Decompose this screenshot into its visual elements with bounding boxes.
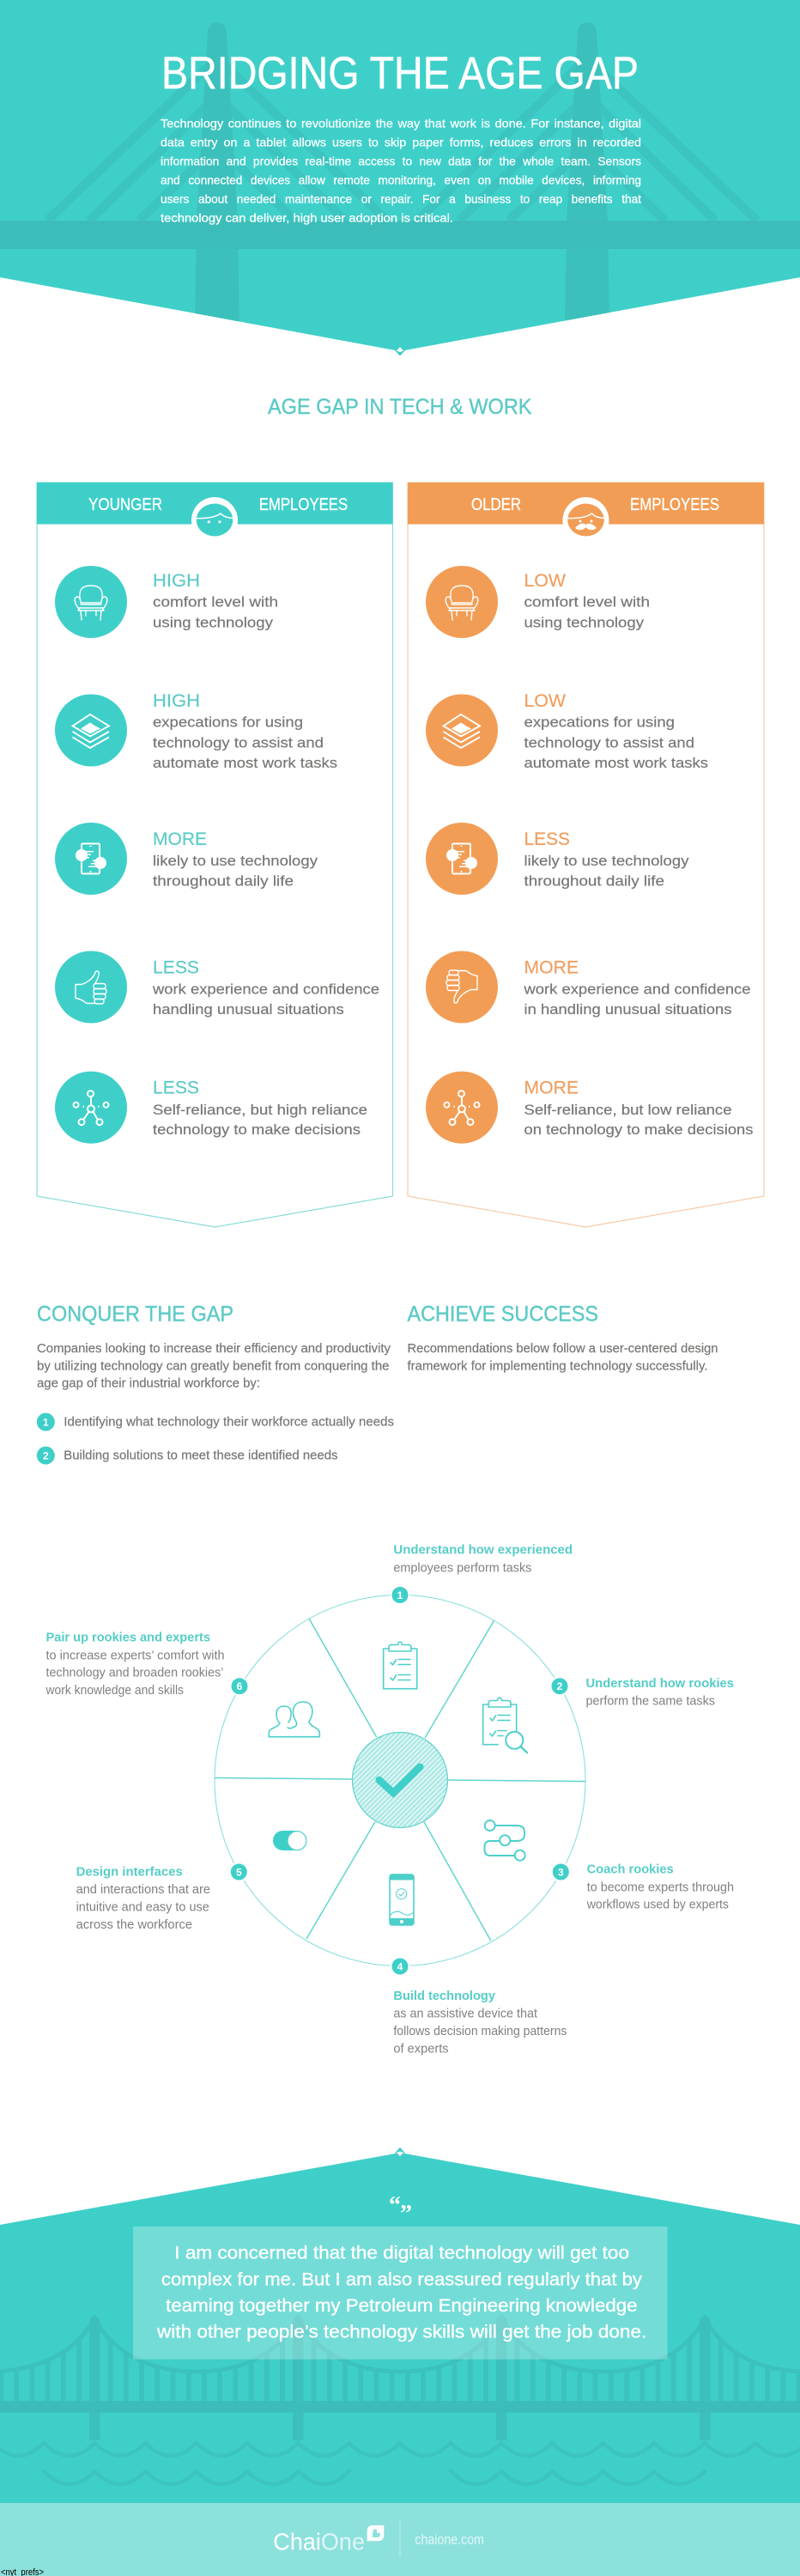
row: work experience: handling unusual situations <box>153 1001 344 1018</box>
row: daily use: likely to use technology <box>153 853 318 869</box>
step 3 text <box>586 1862 734 1912</box>
step 5 text <box>76 1865 210 1932</box>
quote text: I am concerned that the digital technology will get too <box>174 2244 629 2263</box>
row: comfort level: using technology <box>524 614 645 630</box>
quote box <box>133 2227 668 2360</box>
node 6 <box>230 1677 249 1695</box>
quote marks: ” <box>400 2201 412 2227</box>
icon: clipboard with magnifier <box>483 1698 527 1753</box>
node 3 <box>552 1863 570 1880</box>
row: self-reliance: Self-reliance, but low reliance <box>524 1102 731 1118</box>
row: expectations: HIGH <box>153 691 200 711</box>
step 6 text: Pair up rookies and experts <box>46 1631 210 1644</box>
step 4 text: as an assistive device that <box>393 2008 537 2021</box>
row: daily use <box>426 823 689 895</box>
footer <box>0 2503 800 2576</box>
icon: workflow path <box>484 1820 525 1861</box>
heading: age gap in tech and work: AGE GAP IN TECH & WORK <box>268 395 532 419</box>
list item 1: Identifying what technology their workforce actually needs <box>64 1415 394 1429</box>
hero banner <box>0 0 800 355</box>
header label employees: EMPLOYEES <box>259 495 348 514</box>
closing quote panel <box>0 2148 800 2503</box>
header label younger: YOUNGER <box>88 495 162 514</box>
step 6 text: to increase experts’ comfort with <box>46 1649 225 1662</box>
step 4 text: follows decision making patterns <box>393 2025 567 2038</box>
row: comfort level: HIGH <box>153 571 200 591</box>
step 6 text: work knowledge and skills <box>45 1684 184 1698</box>
node 5 <box>230 1863 248 1880</box>
node 1 <box>391 1586 409 1604</box>
step 5 text: Design interfaces <box>76 1865 183 1879</box>
row: daily use <box>55 823 318 895</box>
list item 2 <box>37 1446 338 1465</box>
row: work experience: work experience and confidence <box>152 981 379 997</box>
node 2 <box>551 1677 568 1695</box>
node 3: 3 <box>558 1867 564 1879</box>
row: expectations <box>55 691 337 771</box>
quote text: complex for me. But I am also reassured regularly that by <box>161 2269 643 2289</box>
row: expectations: technology to assist and <box>153 734 324 750</box>
row: self-reliance: on technology to make decisions <box>524 1121 754 1138</box>
intro paragraph: users about needed maintenance or repair. For a business to reap benefits that <box>161 192 641 206</box>
step 1 text: employees perform tasks <box>393 1561 531 1575</box>
row: comfort level <box>426 566 650 638</box>
section: achieve success <box>407 1303 718 1373</box>
node 4: 4 <box>397 1961 403 1973</box>
row: work experience <box>55 951 379 1024</box>
step 3 text: Coach rookies <box>587 1862 674 1876</box>
title: BRIDGING THE AGE GAP <box>161 48 639 99</box>
center check disc <box>352 1733 448 1827</box>
text block: achieve intro <box>407 1342 718 1373</box>
step 2 text <box>585 1677 734 1709</box>
section: conquer the gap <box>37 1303 394 1465</box>
step 1 text <box>393 1544 573 1575</box>
row: self-reliance: MORE <box>524 1078 579 1097</box>
intro paragraph: information and provides real-time access to new data for the whole team. Sensors <box>161 155 641 168</box>
step 1 text: Understand how experienced <box>393 1544 573 1558</box>
intro paragraph: data entry on a tablet allows users to skip paper forms, reduces errors in recorded <box>161 136 641 149</box>
row: expectations: technology to assist and <box>524 734 694 750</box>
row: expectations: automate most work tasks <box>153 755 337 771</box>
icon: smartphone <box>390 1874 414 1925</box>
row: comfort level: LOW <box>524 571 566 591</box>
text block: achieve intro: framework for implementing technology successfully. <box>407 1359 707 1373</box>
row: expectations: automate most work tasks <box>524 755 708 771</box>
node 5: 5 <box>236 1867 242 1879</box>
row: work experience: in handling unusual situations <box>524 1001 731 1018</box>
heading: achieve success: ACHIEVE SUCCESS <box>407 1303 598 1327</box>
step 4 text: of experts <box>393 2043 449 2057</box>
row: daily use: MORE <box>153 829 207 849</box>
list item 2: 2 <box>43 1449 49 1461</box>
text block: conquer intro <box>37 1342 391 1390</box>
node 2: 2 <box>557 1680 563 1692</box>
row: daily use: throughout daily life <box>153 872 294 889</box>
intro paragraph: Technology continues to revolutionize the way that work is done. For instance, digital <box>161 117 641 131</box>
row: expectations: LOW <box>524 691 566 711</box>
row: self-reliance <box>55 1072 367 1144</box>
bridge silhouette and water <box>0 2316 800 2484</box>
quote text: with other people’s technology skills will get the job done. <box>156 2323 646 2342</box>
node 6: 6 <box>237 1680 243 1692</box>
website address: chaione.com <box>415 2531 484 2548</box>
list item 1 <box>37 1413 394 1431</box>
logo wordmark: ChaiOne <box>273 2528 365 2555</box>
row: self-reliance: LESS <box>153 1078 199 1097</box>
text block: achieve intro: Recommendations below follow a user-centered design <box>407 1342 718 1356</box>
row: daily use: likely to use technology <box>524 853 689 869</box>
header label employees: EMPLOYEES <box>630 495 719 514</box>
row: expectations: expecations for using <box>524 714 675 731</box>
row: daily use: throughout daily life <box>524 872 664 889</box>
step 5 text: across the workforce <box>76 1918 192 1932</box>
list item 1: 1 <box>43 1416 49 1428</box>
row: daily use: LESS <box>524 829 570 849</box>
row: expectations: expecations for using <box>153 714 303 731</box>
step 4 text <box>393 1990 567 2057</box>
icon: older face avatar <box>563 497 609 544</box>
step 2 text: Understand how rookies <box>585 1677 734 1691</box>
quote marks: “ <box>389 2192 401 2219</box>
text block: conquer intro: age gap of their industrial workforce by: <box>37 1376 260 1390</box>
intro paragraph <box>161 117 641 225</box>
heading: conquer the gap: CONQUER THE GAP <box>37 1303 233 1327</box>
logo mark <box>367 2525 384 2541</box>
footer divider <box>400 2520 401 2557</box>
row: work experience: MORE <box>524 957 579 977</box>
row: work experience: LESS <box>153 957 199 977</box>
icon: toggle switch <box>273 1831 306 1850</box>
header label older: OLDER <box>471 495 521 514</box>
intro paragraph: technology can deliver, high user adoption is critical. <box>161 211 453 225</box>
row: self-reliance <box>426 1072 754 1144</box>
panel: older employees <box>408 483 764 1227</box>
step 4 text: Build technology <box>393 1990 495 2003</box>
quote text: teaming together my Petroleum Engineering knowledge <box>166 2296 638 2316</box>
bridge silhouette <box>0 22 800 326</box>
row: expectations <box>426 691 708 771</box>
step 3 text: workflows used by experts <box>586 1899 729 1912</box>
step 2 text: perform the same tasks <box>585 1695 715 1709</box>
row: comfort level: comfort level with <box>524 594 650 611</box>
row: comfort level: using technology <box>153 614 274 630</box>
step 6 text <box>45 1631 225 1698</box>
node 1: 1 <box>397 1589 403 1601</box>
row: comfort level <box>55 566 278 638</box>
icon: clipboard checklist <box>384 1642 417 1689</box>
list item 2: Building solutions to meet these identified needs <box>64 1449 338 1462</box>
step 5 text: and interactions that are <box>76 1883 210 1897</box>
wheel diagram <box>215 1586 585 1975</box>
icon: young face avatar <box>191 497 238 544</box>
intro paragraph: and connected devices allow remote monitoring, even on mobile devices, informing <box>161 173 641 187</box>
row: self-reliance: technology to make decisions <box>153 1121 361 1138</box>
text block: conquer intro: by utilizing technology can greatly benefit from conquering the <box>37 1359 390 1373</box>
step 5 text: intuitive and easy to use <box>76 1900 209 1914</box>
row: work experience: work experience and confidence <box>523 981 750 997</box>
row: comfort level: comfort level with <box>153 594 278 611</box>
quote text <box>156 2244 646 2342</box>
node 4 <box>391 1958 409 1975</box>
step 3 text: to become experts through <box>587 1880 734 1894</box>
icon: two people <box>269 1702 319 1737</box>
step 6 text: technology and broaden rookies’ <box>46 1667 223 1680</box>
row: self-reliance: Self-reliance, but high reliance <box>153 1102 367 1118</box>
panel: younger employees <box>37 483 393 1227</box>
text block: conquer intro: Companies looking to increase their efficiency and productivity <box>37 1342 391 1356</box>
quote marks <box>389 2192 412 2227</box>
row: work experience <box>426 951 750 1024</box>
